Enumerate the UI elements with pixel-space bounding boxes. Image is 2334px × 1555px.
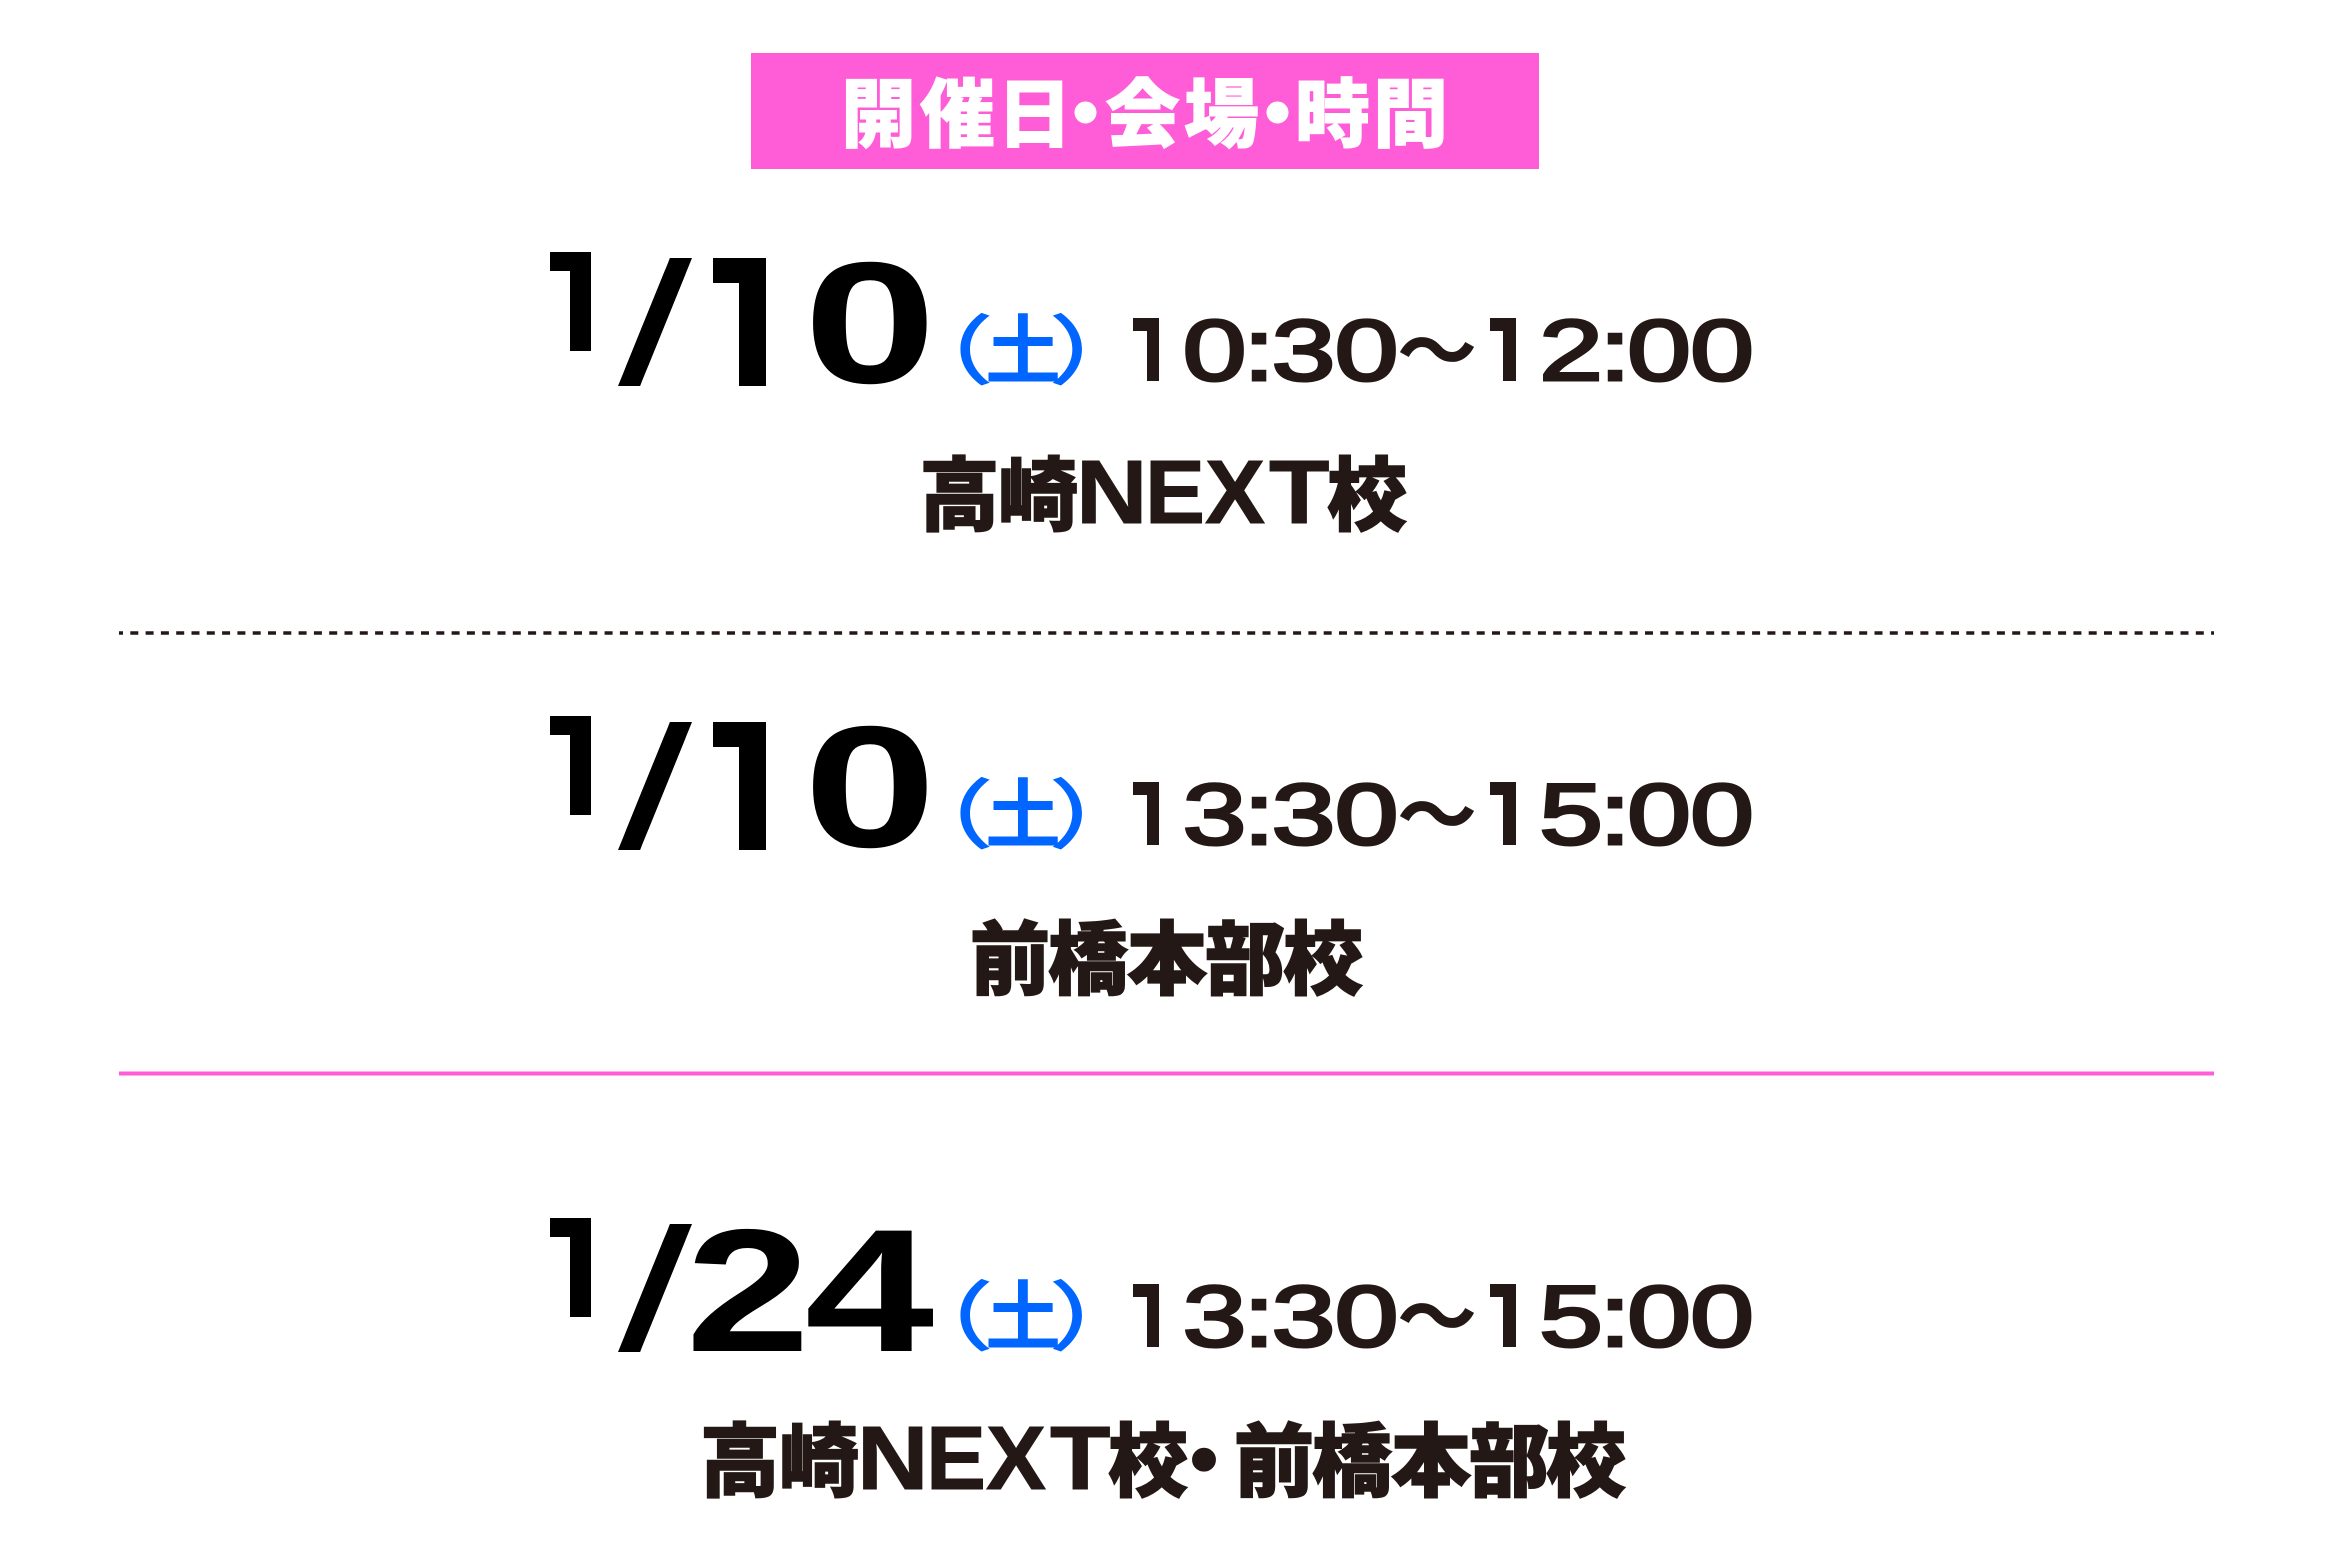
date: 1/10: 1 bbox=[687, 694, 803, 887]
venue: Takasaki NEXT: 校 bbox=[1327, 452, 1407, 541]
time: 13:30-15:00: 0 bbox=[1335, 1269, 1398, 1365]
weekday: Saturday bbox=[888, 1256, 1154, 1366]
time: 13:30-15:00: 1 bbox=[1119, 1269, 1181, 1365]
weekday: Saturday: ） bbox=[1048, 1256, 1154, 1366]
time: 13:30-15:00: 〜 bbox=[1397, 1254, 1477, 1370]
time: 10:30-12:00: 0 bbox=[1690, 303, 1754, 399]
time: 10:30-12:00: : bbox=[1599, 303, 1631, 399]
weekday: Saturday: （ bbox=[888, 754, 994, 864]
date: 1/24: 1 bbox=[529, 1186, 615, 1348]
time: 13:30-15:00: 0 bbox=[1335, 767, 1398, 863]
weekday: Saturday: 土 bbox=[985, 290, 1061, 400]
venue: Takasaki NEXT: T bbox=[1269, 442, 1329, 543]
weekday: Saturday: 土 bbox=[985, 1256, 1061, 1366]
time: 13:30-15:00: : bbox=[1599, 767, 1631, 863]
weekday: Saturday: （ bbox=[888, 1256, 994, 1366]
venues: Takasaki NEXT and Maebashi main school: ・ bbox=[1164, 1418, 1244, 1507]
weekday: Saturday bbox=[888, 290, 1154, 400]
time: 13:30-15:00: 3 bbox=[1272, 1269, 1335, 1365]
venues: Takasaki NEXT and Maebashi main school: T bbox=[1050, 1408, 1110, 1509]
venue: Takasaki NEXT bbox=[920, 442, 1407, 543]
time: 10:30-12:00 bbox=[1133, 318, 1752, 382]
time: 10:30-12:00: 0 bbox=[1335, 303, 1398, 399]
time: 13:30-15:00: 0 bbox=[1690, 767, 1754, 863]
time: 13:30-15:00: 1 bbox=[1476, 1269, 1538, 1365]
time: 13:30-15:00: 3 bbox=[1183, 1269, 1246, 1365]
venues: Takasaki NEXT and Maebashi main school: E bbox=[926, 1409, 986, 1509]
time: 10:30-12:00: 3 bbox=[1272, 303, 1335, 399]
time: 10:30-12:00: 0 bbox=[1627, 303, 1691, 399]
time: 10:30-12:00: 0 bbox=[1183, 303, 1246, 399]
date: 1/10 bbox=[550, 252, 927, 386]
date: 1/10 bbox=[550, 716, 927, 850]
time: 10:30-12:00: 1 bbox=[1119, 303, 1181, 399]
time: 13:30-15:00: : bbox=[1599, 1269, 1631, 1365]
time: 13:30-15:00: 0 bbox=[1690, 1269, 1754, 1365]
heading: date, venue, time: 開催日・会場・時間 bbox=[841, 54, 1448, 163]
date: 1/24 bbox=[550, 1218, 933, 1352]
date: 1/24: / bbox=[616, 1188, 694, 1391]
venues: Takasaki NEXT and Maebashi main school: 高崎 bbox=[700, 1418, 859, 1507]
time: 13:30-15:00 bbox=[1133, 782, 1752, 846]
venue: Maebashi main school: 前橋本部校 bbox=[970, 916, 1363, 1005]
weekday: Saturday: （ bbox=[888, 290, 994, 400]
date: 1/10: 1 bbox=[529, 220, 615, 382]
venues: Takasaki NEXT and Maebashi main school: X bbox=[986, 1409, 1046, 1509]
weekday: Saturday: ） bbox=[1048, 754, 1154, 864]
venue: Takasaki NEXT: E bbox=[1145, 443, 1205, 543]
weekday: Saturday: ） bbox=[1048, 290, 1154, 400]
time: 13:30-15:00: 〜 bbox=[1397, 752, 1477, 868]
weekday: Saturday bbox=[888, 754, 1154, 864]
time: 13:30-15:00: : bbox=[1243, 1269, 1275, 1365]
venue: Takasaki NEXT: N bbox=[1076, 442, 1148, 543]
pink divider bbox=[119, 1072, 2214, 1076]
time: 13:30-15:00: 0 bbox=[1627, 1269, 1691, 1365]
time: 10:30-12:00: : bbox=[1243, 303, 1275, 399]
schedule row 3 bbox=[550, 1218, 1752, 1499]
time: 10:30-12:00: 〜 bbox=[1397, 288, 1477, 404]
venues: Takasaki NEXT and Maebashi main school: N bbox=[857, 1408, 929, 1509]
venues: Takasaki NEXT and Maebashi main school: 前橋本部校 bbox=[1234, 1418, 1626, 1507]
date: 1/24: 4 bbox=[805, 1193, 934, 1388]
schedule row 1 bbox=[550, 252, 1752, 533]
time: 13:30-15:00: 3 bbox=[1272, 767, 1335, 863]
date: 1/10: / bbox=[616, 686, 694, 889]
time: 13:30-15:00 bbox=[1133, 1284, 1752, 1348]
venue: Takasaki NEXT: 高崎 bbox=[920, 452, 1078, 541]
date: 1/10: 1 bbox=[529, 684, 615, 846]
schedule row 2 bbox=[550, 716, 1752, 997]
time: 13:30-15:00: 0 bbox=[1627, 767, 1691, 863]
time: 13:30-15:00: 5 bbox=[1539, 767, 1603, 863]
date: 1/10: 1 bbox=[687, 230, 803, 423]
time: 13:30-15:00: : bbox=[1243, 767, 1275, 863]
time: 13:30-15:00: 1 bbox=[1476, 767, 1538, 863]
time: 10:30-12:00: 2 bbox=[1539, 303, 1603, 399]
venues: Takasaki NEXT and Maebashi main school bbox=[700, 1408, 1626, 1509]
date: 1/10: 0 bbox=[804, 226, 936, 420]
time: 10:30-12:00: 1 bbox=[1476, 303, 1538, 399]
venue: Takasaki NEXT: X bbox=[1205, 443, 1265, 543]
time: 13:30-15:00: 3 bbox=[1183, 767, 1246, 863]
date: 1/10: 0 bbox=[804, 690, 936, 884]
date: 1/10: / bbox=[616, 222, 694, 425]
date: 1/24: 2 bbox=[686, 1193, 810, 1388]
time: 13:30-15:00: 5 bbox=[1539, 1269, 1603, 1365]
dotted divider bbox=[119, 631, 2214, 635]
weekday: Saturday: 土 bbox=[985, 754, 1061, 864]
time: 13:30-15:00: 1 bbox=[1119, 767, 1181, 863]
venues: Takasaki NEXT and Maebashi main school: 校 bbox=[1108, 1418, 1188, 1507]
